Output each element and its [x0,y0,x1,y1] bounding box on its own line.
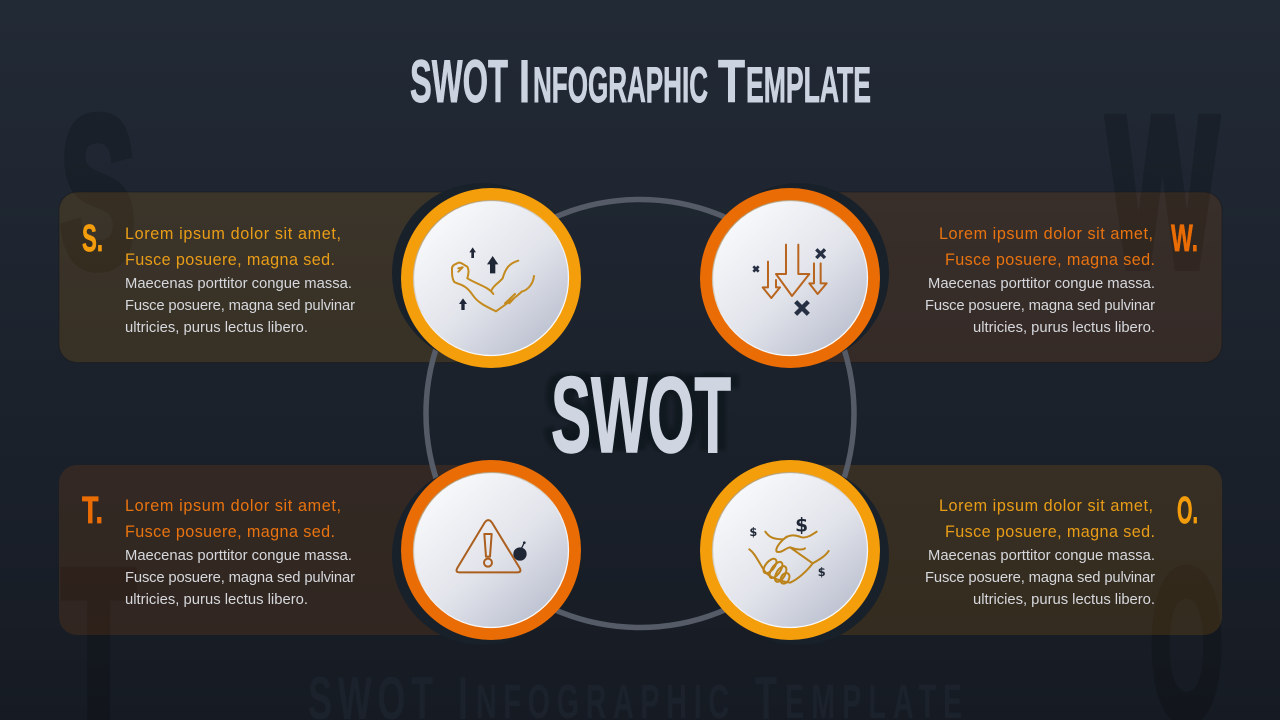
badge: opportunities [700,460,889,645]
opportunities body: ultricies, purus lectus libero. [973,592,1155,608]
title: I [519,48,530,115]
icon: handshake with dollar signs: $ [818,565,826,579]
icon: falling arrows with crosses [753,245,827,314]
title: T [718,48,745,115]
opportunities body [925,548,1155,608]
strengths body [125,276,355,336]
panel: threats [59,465,489,635]
weaknesses heading [939,225,1155,269]
icon: handshake with dollar signs: $ [795,515,808,536]
title: SWOT [410,48,508,115]
weaknesses body [925,276,1155,336]
strengths heading [125,225,341,269]
threats heading: Lorem ipsum dolor sit amet, [125,497,341,515]
central ring [426,200,854,628]
badge: weaknesses [700,183,889,368]
strengths body: ultricies, purus lectus libero. [125,320,308,336]
weaknesses heading: Fusce posuere, magna sed. [945,251,1155,269]
panel: opportunities [792,465,1222,635]
icon: flexed arm with up arrows [452,247,534,311]
title: EMPLATE [746,57,871,113]
threats body: ultricies, purus lectus libero. [125,592,308,608]
title [410,48,871,115]
strengths body: Fusce posuere, magna sed pulvinar [125,298,355,314]
opportunities heading: Lorem ipsum dolor sit amet, [939,497,1153,515]
weaknesses body: ultricies, purus lectus libero. [973,320,1155,336]
title: NFOGRAPHIC [533,57,708,113]
threats body [125,548,355,608]
icon: handshake with dollar signs [749,515,829,585]
center word SWOT [543,351,739,475]
opportunities heading: Fusce posuere, magna sed. [945,523,1155,541]
center word SWOT: SWOT [559,351,739,472]
threats heading: Fusce posuere, magna sed. [125,523,335,541]
background letter S: S [60,73,136,312]
weaknesses body: Fusce posuere, magna sed pulvinar [925,298,1155,314]
icon: warning triangle with bomb [457,520,527,572]
strengths heading: Lorem ipsum dolor sit amet, [125,225,341,243]
panel: weaknesses [792,192,1222,362]
threats heading [125,497,341,541]
icon: handshake with dollar signs: $ [749,525,757,539]
opportunities body: Fusce posuere, magna sed pulvinar [925,570,1155,586]
weaknesses heading: Lorem ipsum dolor sit amet, [939,225,1153,243]
faded footer title [300,670,980,720]
badge: threats [392,460,581,645]
opportunities letter: O. [1177,490,1198,532]
center word SWOT: SWOT [551,354,731,475]
background letter W: W [1107,73,1218,312]
strengths heading: Fusce posuere, magna sed. [125,251,335,269]
threats letter: T. [82,490,103,532]
weaknesses body: Maecenas porttitor congue massa. [928,276,1155,292]
strengths letter: S. [82,218,103,260]
badge: strengths [392,183,581,368]
opportunities body: Maecenas porttitor congue massa. [928,548,1155,564]
opportunities heading [939,497,1155,541]
strengths body: Maecenas porttitor congue massa. [125,276,352,292]
threats body: Maecenas porttitor congue massa. [125,548,352,564]
threats body: Fusce posuere, magna sed pulvinar [125,570,355,586]
center word SWOT: SWOT [543,351,723,472]
panel: strengths [59,192,489,362]
weaknesses letter: W. [1171,218,1198,260]
